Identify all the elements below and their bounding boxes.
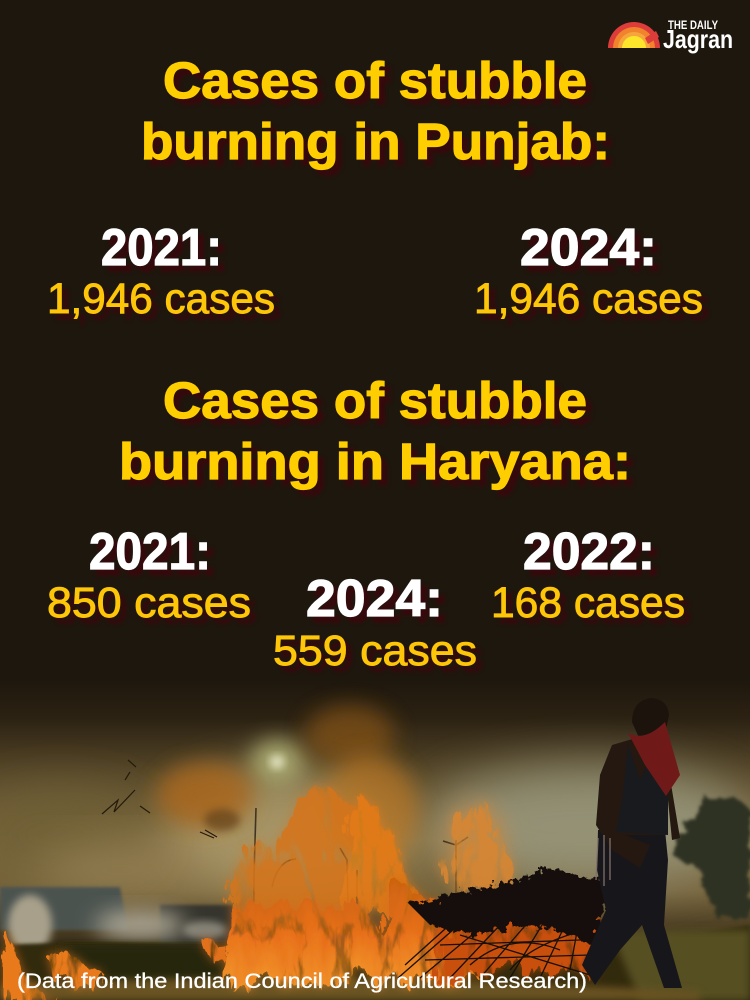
source note: (Data from the Indian Council of Agricultural Research) xyxy=(17,970,587,993)
logo wordmark: Jagran xyxy=(663,24,733,54)
tall flames xyxy=(221,774,508,905)
Haryana 2024: 2024: xyxy=(306,570,443,628)
orange smoke xyxy=(157,705,509,880)
red scarf xyxy=(628,722,680,796)
heading: Haryana: Cases of stubble xyxy=(163,372,587,429)
heading: Punjab xyxy=(141,52,610,170)
Haryana 2021: 850 cases xyxy=(47,579,251,627)
distant buildings and white smoke xyxy=(0,887,235,955)
burning brush pile xyxy=(398,869,612,978)
Haryana 2022: 2022: xyxy=(523,523,655,581)
heading: Punjab: Cases of stubble xyxy=(163,52,587,109)
heading: Punjab: burning in Punjab: xyxy=(141,113,610,170)
flying debris xyxy=(102,760,217,838)
Haryana 2024: 559 cases xyxy=(273,627,477,675)
photo: burning field xyxy=(0,680,750,1000)
rake handle xyxy=(600,843,664,880)
Punjab 2021 xyxy=(47,219,275,323)
ground xyxy=(0,925,750,1000)
Punjab 2024 xyxy=(474,219,703,323)
Punjab 2024: 2024: xyxy=(520,219,657,277)
poles xyxy=(254,808,468,905)
main fire xyxy=(0,880,475,1000)
Haryana 2021 xyxy=(47,523,251,627)
logo text: THE DAILY xyxy=(668,20,718,32)
heading: Haryana xyxy=(119,372,631,490)
singlet xyxy=(616,745,668,835)
icon: sun xyxy=(608,22,660,48)
Haryana 2024 xyxy=(273,570,477,675)
tree xyxy=(672,796,750,917)
man with rake xyxy=(582,698,682,988)
torso and arms xyxy=(596,738,680,868)
logo xyxy=(608,20,718,48)
Haryana 2022 xyxy=(491,523,685,627)
Punjab 2021: 1,946 cases xyxy=(47,275,275,323)
Haryana 2021: 2021: xyxy=(89,523,211,581)
heading: Haryana: burning in Haryana: xyxy=(119,433,631,490)
Punjab 2024: 1,946 cases xyxy=(474,275,703,323)
track stripes xyxy=(596,835,610,886)
sky and smoke xyxy=(0,680,750,1000)
Punjab 2021: 2021: xyxy=(101,219,222,277)
Haryana 2022: 168 cases xyxy=(491,579,685,627)
head xyxy=(632,698,669,740)
legs xyxy=(582,830,682,988)
